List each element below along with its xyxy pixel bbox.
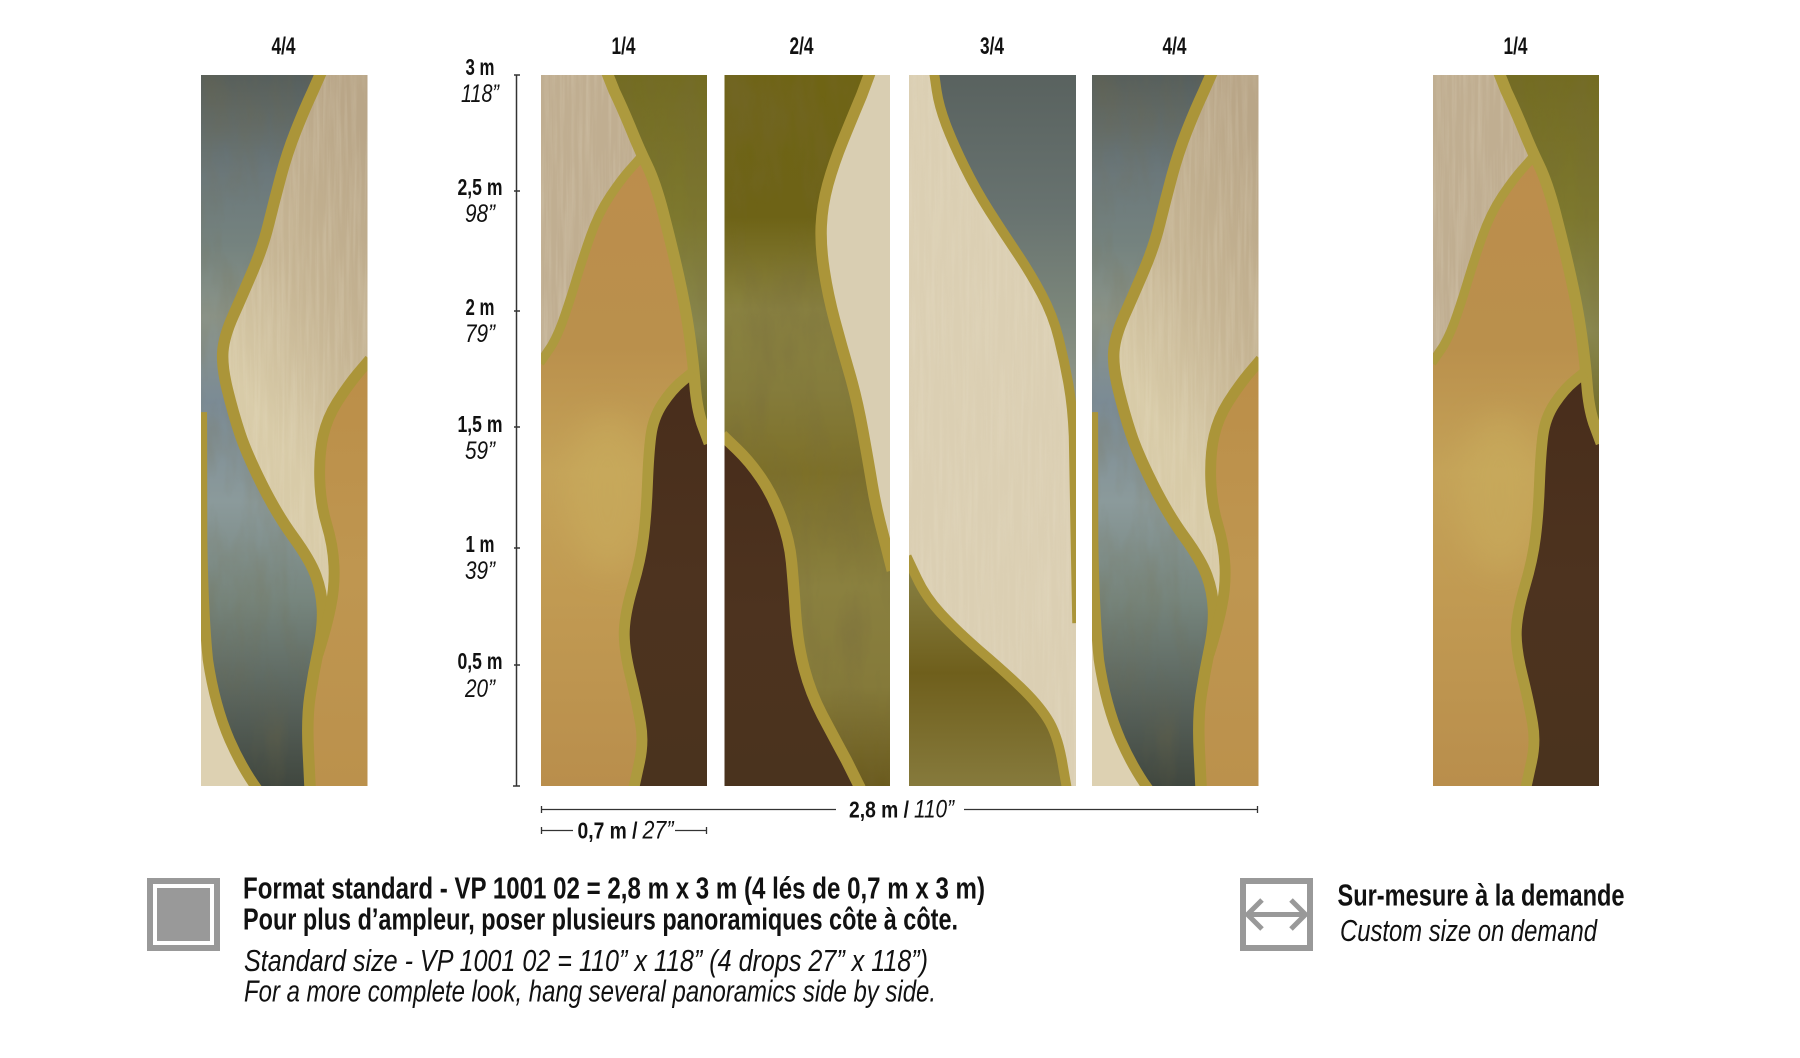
drop width dimension: 0,7 m / 27": 27” bbox=[642, 816, 675, 844]
panel: drop 3/4 bbox=[907, 33, 1077, 788]
height scale bbox=[458, 54, 520, 786]
height scale: 79” bbox=[465, 320, 496, 348]
height scale: 20” bbox=[464, 675, 496, 703]
icon: standard format bbox=[150, 881, 217, 948]
text block: standard format bbox=[243, 870, 985, 1008]
drop width dimension: 0,7 m / 27": 0,7 m / bbox=[578, 818, 638, 844]
panel: right drop 1/4 bbox=[1432, 33, 1601, 788]
icon: custom size arrows bbox=[1243, 881, 1310, 948]
wallpaper drop 2/4 bbox=[724, 75, 890, 786]
drop width dimension: 0,7 m / 27" bbox=[541, 816, 707, 844]
total width dimension: 2,8 m / 110": 2,8 m / bbox=[849, 796, 909, 822]
total width dimension: 2,8 m / 110" bbox=[541, 796, 1258, 824]
label: 1/4: 1/4 bbox=[612, 33, 636, 60]
text block: standard format: For a more complete look, hang several panoramics side by side. bbox=[244, 974, 936, 1008]
height scale: 3 m bbox=[466, 54, 494, 80]
height scale: 59” bbox=[465, 437, 496, 465]
panel: left drop 4/4 bbox=[201, 33, 370, 791]
text block: custom size bbox=[1338, 878, 1624, 948]
wallpaper drop 3/4 bbox=[909, 75, 1076, 786]
wallpaper drop 4/4 bbox=[1092, 73, 1261, 791]
label: 4/4: 4/4 bbox=[272, 33, 296, 60]
height scale: 118” bbox=[461, 80, 500, 108]
height scale: 1,5 m bbox=[458, 411, 502, 437]
panel: drop 4/4 bbox=[1092, 33, 1261, 791]
wallpaper drop 1/4 bbox=[1432, 73, 1601, 788]
label: 3/4: 3/4 bbox=[980, 33, 1004, 60]
wallpaper drop 1/4 bbox=[540, 73, 709, 788]
total width dimension: 2,8 m / 110": 110” bbox=[914, 796, 955, 824]
panel: drop 2/4 bbox=[722, 33, 892, 788]
text block: standard format: Standard size - VP 1001 02 = 110” x 118” (4 drops 27” x 118”) bbox=[244, 943, 928, 978]
label: 2/4: 2/4 bbox=[790, 33, 814, 60]
wallpaper drop 4/4 bbox=[201, 73, 370, 791]
height scale: 39” bbox=[465, 557, 496, 585]
height scale: 1 m bbox=[466, 531, 494, 557]
text block: standard format: Pour plus d’ampleur, poser plusieurs panoramiques côte à côte. bbox=[243, 902, 958, 936]
panel: drop 1/4 bbox=[540, 33, 709, 788]
height scale: 2,5 m bbox=[458, 174, 502, 200]
label: 1/4: 1/4 bbox=[1504, 33, 1528, 60]
height scale: 2 m bbox=[466, 294, 494, 320]
height scale: 0,5 m bbox=[458, 648, 502, 674]
height scale: 98” bbox=[465, 200, 496, 228]
text block: standard format: Format standard - VP 1001 02 = 2,8 m x 3 m (4 lés de 0,7 m x 3 m) bbox=[243, 870, 985, 906]
text block: custom size: Custom size on demand bbox=[1340, 913, 1598, 948]
label: 4/4: 4/4 bbox=[1162, 33, 1187, 60]
text block: custom size: Sur-mesure à la demande bbox=[1338, 878, 1624, 912]
